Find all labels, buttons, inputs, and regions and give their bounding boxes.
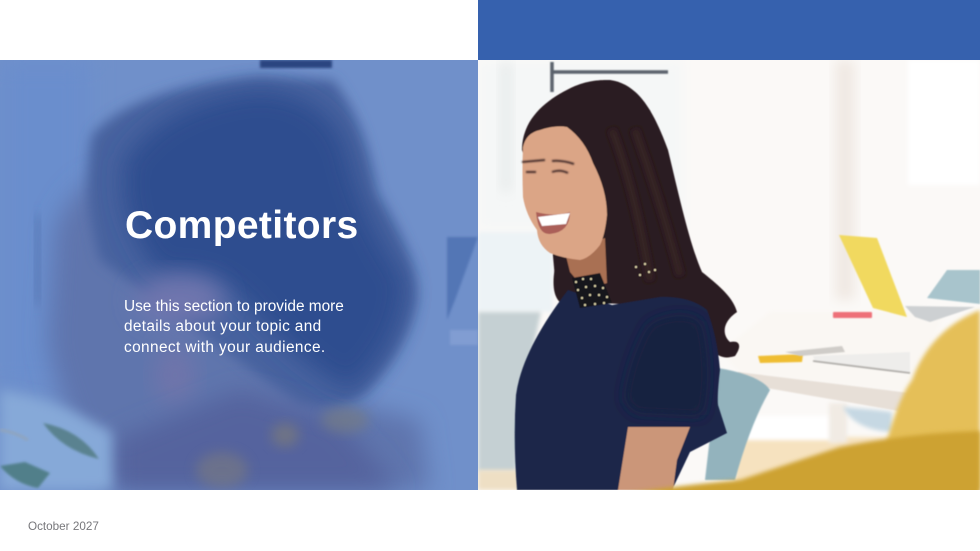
leaf 1 [43,423,99,459]
lower dress [115,390,400,490]
arm [618,427,690,490]
heading: Competitors [125,204,359,247]
hair highlights [612,130,680,280]
right side window [447,237,478,320]
woman: dress [515,290,727,490]
collar [572,273,612,308]
back window [478,60,683,230]
neck [565,238,607,290]
hair mid fill [540,110,682,290]
yellow note [758,354,803,363]
body text [124,298,344,356]
face [522,126,607,260]
body text: details about your topic and [124,318,321,335]
date footer: October 2027 [28,520,99,533]
pink note [833,312,872,318]
table leg and stool [829,403,847,443]
teal chair behind woman [705,368,770,480]
yellow arm foreground [590,431,980,500]
sleeve [625,317,707,415]
skin highlight [135,275,225,325]
woman: hair [522,80,739,357]
head top stub [260,60,332,68]
yellow laptop [839,235,907,317]
yellow chair foreground [880,310,980,490]
body blur [48,176,430,490]
eyes and brows [522,160,574,173]
mouth [536,212,570,234]
body text: connect with your audience. [124,339,326,356]
table [720,312,945,393]
leaf 2 [0,462,50,488]
chair left [478,312,541,472]
hair core [123,90,405,390]
hair outer [88,76,417,408]
bottom-left patch [0,390,112,490]
top blue banner [478,0,980,60]
blurred blue panel [0,60,478,490]
body text: Use this section to provide more [124,298,344,315]
blue chair right [927,270,980,304]
woman figure [515,80,739,490]
floor [735,437,895,487]
window frame [552,62,668,92]
warm spots [321,407,369,433]
photo: smiling woman in office [478,60,980,490]
